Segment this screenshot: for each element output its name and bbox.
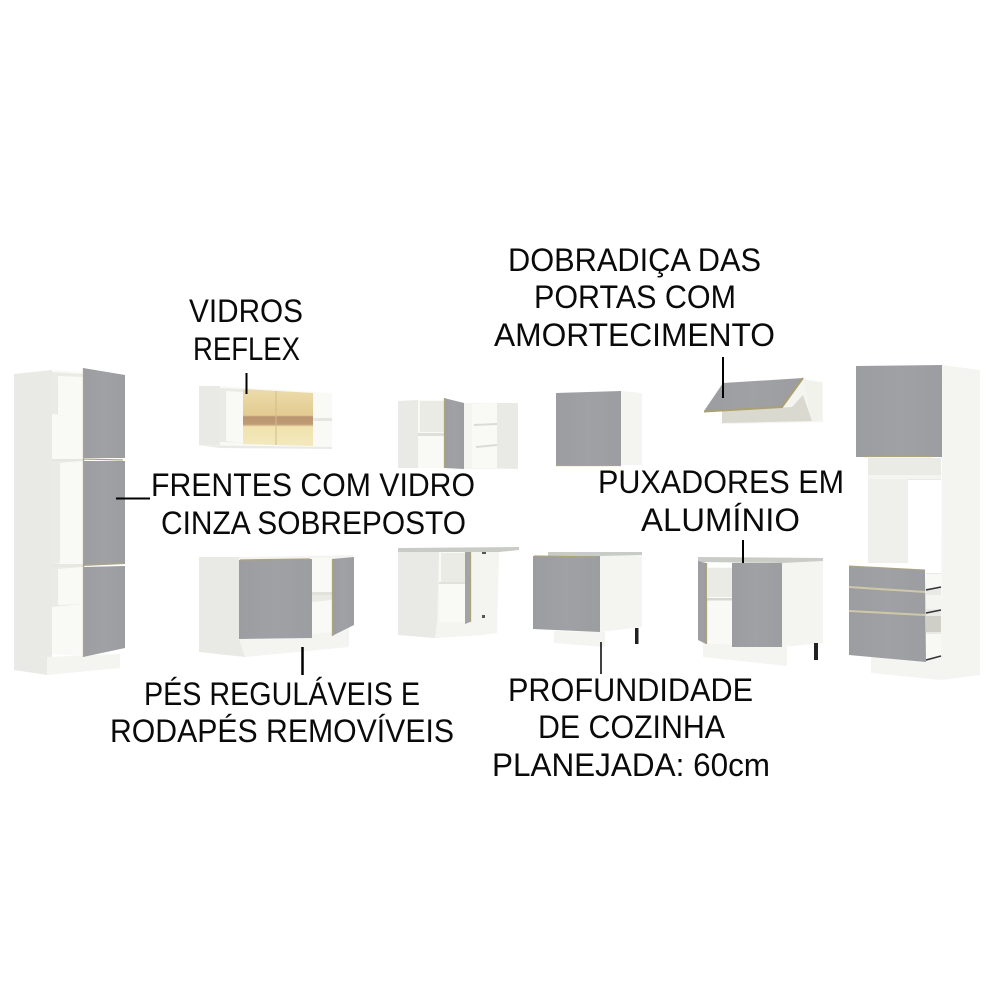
- upper door: [856, 365, 942, 457]
- gray glass door, middle: [83, 461, 125, 566]
- label: depth: PLANEJADA: 60cm: [492, 747, 770, 783]
- label: depth: [492, 642, 770, 783]
- left door: [698, 561, 706, 644]
- oven opening: [908, 480, 941, 563]
- glass doors: [243, 389, 313, 446]
- label: depth: DE COZINHA: [538, 709, 726, 745]
- door: [533, 556, 600, 632]
- door: [556, 391, 621, 465]
- label: aluminum handles: [598, 464, 844, 563]
- wall cabinet with reflex glass: [199, 386, 332, 449]
- tall oven cabinet: [849, 365, 980, 680]
- adjustable leg: [635, 628, 638, 644]
- wall cabinet gray: [556, 391, 642, 466]
- gray glass door, lower: [83, 566, 125, 657]
- corner base cabinet: [398, 547, 519, 638]
- corner wall cabinet: [398, 398, 518, 469]
- base cabinet with open door: [698, 557, 823, 666]
- gray glass door, upper: [83, 368, 125, 458]
- label: glass: REFLEX: [193, 331, 300, 367]
- drawers: [849, 566, 926, 662]
- label: glass: VIDROS: [189, 293, 303, 329]
- left door: [239, 559, 312, 639]
- label: adjustable feet: RODAPÉS REMOVÍVEIS: [110, 713, 454, 749]
- folding door: [465, 552, 470, 624]
- label: aluminum handles: ALUMÍNIO: [641, 502, 800, 538]
- label: hinges: DOBRADIÇA DAS: [508, 242, 761, 278]
- label: gray glass fronts: FRENTES COM VIDRO: [151, 467, 475, 503]
- label: hinges: PORTAS COM: [534, 279, 736, 315]
- label: hinges: [494, 242, 775, 398]
- label: adjustable feet: [110, 647, 454, 749]
- label: adjustable feet: PÉS REGULÁVEIS E: [144, 676, 420, 712]
- right door: [332, 557, 354, 636]
- label: gray glass fronts: [116, 467, 475, 541]
- label: gray glass fronts: CINZA SOBREPOSTO: [161, 505, 466, 541]
- flip-up wall cabinet: [704, 378, 823, 424]
- base cabinet gray: [533, 552, 642, 647]
- label: hinges: AMORTECIMENTO: [494, 317, 775, 353]
- front door: [732, 563, 782, 647]
- adjustable leg: [814, 643, 818, 660]
- label: glass: [189, 293, 303, 394]
- flip-up door: [704, 378, 803, 411]
- drawer interior: [926, 573, 941, 661]
- label: depth: PROFUNDIDADE: [508, 672, 753, 708]
- door: [444, 398, 464, 469]
- low cabinet with two doors: [199, 555, 354, 657]
- tall pantry cabinet: [14, 368, 125, 675]
- label: aluminum handles: PUXADORES EM: [598, 464, 844, 500]
